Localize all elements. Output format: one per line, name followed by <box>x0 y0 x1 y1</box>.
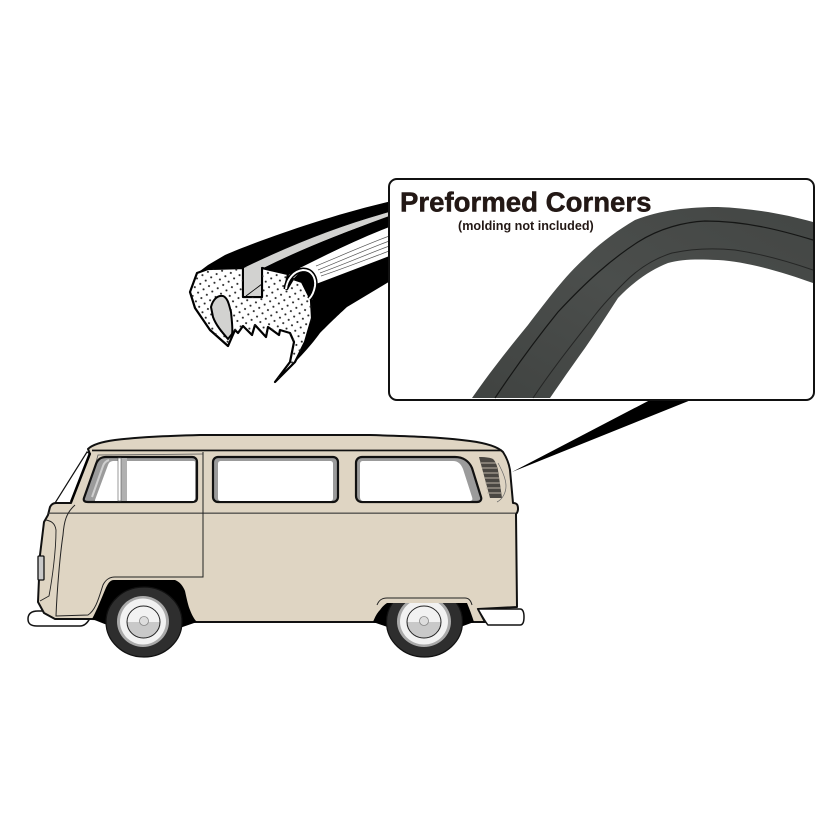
wheel arch trim rear <box>377 598 472 605</box>
seal lip with lines <box>300 226 392 282</box>
belt line <box>48 513 516 514</box>
heading: Preformed Corners <box>400 186 651 218</box>
panel frame <box>389 179 814 400</box>
van body <box>38 435 518 622</box>
panel: preformed corners photo <box>389 179 814 400</box>
thick windshield pillar <box>71 453 90 502</box>
seal cross-section illustration <box>190 201 392 382</box>
windshield <box>55 452 90 503</box>
front indicator and headlight panel <box>40 520 56 601</box>
front door window <box>84 457 197 502</box>
rear wheel <box>386 603 463 658</box>
seal lower black band <box>275 255 392 382</box>
rear wheel well <box>373 603 474 640</box>
seal grey channel strip <box>243 211 392 269</box>
front wheel well <box>92 580 197 640</box>
rear air vent <box>479 457 506 502</box>
seal middle black band <box>262 215 392 276</box>
van illustration <box>28 435 524 657</box>
black fill behind bead <box>293 272 317 300</box>
callout pointer <box>512 400 691 472</box>
roof line <box>92 450 502 451</box>
subheading: (molding not included) <box>458 219 594 233</box>
seal upper black band <box>196 201 392 274</box>
front side light <box>38 556 44 580</box>
rear bumper <box>478 609 524 625</box>
middle window <box>213 457 338 502</box>
bead ring <box>286 270 315 299</box>
grey channel slot <box>244 268 261 296</box>
door top line <box>85 454 203 502</box>
front wheel <box>106 587 182 657</box>
front door seam <box>56 452 203 616</box>
channel diagonal <box>246 284 262 296</box>
front bumper <box>28 611 90 626</box>
teardrop cavity <box>211 296 232 339</box>
rear window <box>356 457 481 502</box>
speckled profile <box>190 268 312 382</box>
rubber corner molding <box>472 207 813 398</box>
